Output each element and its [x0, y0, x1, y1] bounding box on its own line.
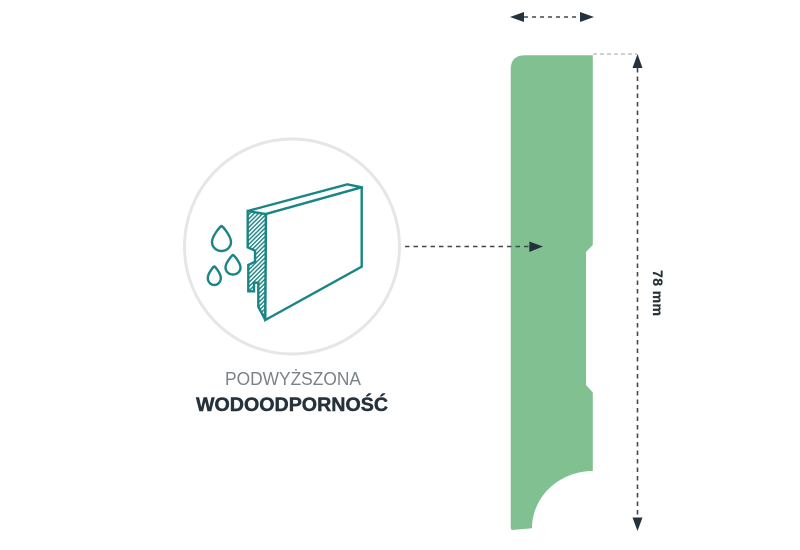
board cross-section: [248, 211, 266, 320]
icon: board with water resistance: [248, 184, 362, 320]
dimension arrow: height: [632, 54, 642, 531]
skirting board profile: [511, 55, 593, 530]
caption: [196, 369, 388, 416]
caption line 1: PODWYŻSZONA: [225, 369, 361, 389]
board top face: [248, 184, 362, 214]
icon: water drops: [208, 226, 240, 285]
pointer arrow: [405, 242, 543, 252]
height label: 78 mm: [650, 270, 666, 316]
dimension arrow: width: [510, 12, 594, 22]
caption line 2: WODOODPORNOŚĆ: [196, 392, 388, 416]
feature icon circle: [184, 139, 400, 354]
board front face: [265, 187, 362, 320]
dimension guide line: [593, 53, 637, 55]
